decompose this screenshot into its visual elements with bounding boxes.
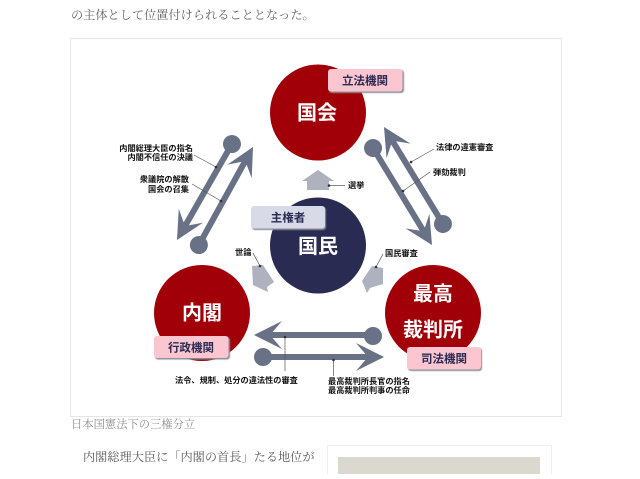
label: dissolution and convocation: 国会の召集 xyxy=(148,184,189,194)
caption: 日本国憲法下の三権分立 xyxy=(71,419,195,431)
circle: Diet: 国会 xyxy=(297,102,337,124)
circle: Diet xyxy=(270,64,366,160)
panel: side image card xyxy=(327,445,552,474)
label: popular review: 国民審査 xyxy=(385,248,418,258)
label: nomination and no-confidence: 内閣総理大臣の指名 xyxy=(119,143,193,153)
label: impeachment court xyxy=(402,167,466,192)
label: judicial review of laws: 法律の違憲審査 xyxy=(436,142,493,152)
arrow: impeachment down-right xyxy=(356,133,444,252)
label: public opinion: 世論 xyxy=(235,247,252,257)
label: election xyxy=(328,180,365,190)
image placeholder xyxy=(338,457,540,474)
badge: legislature xyxy=(328,69,404,93)
arrow: judicial review up-left xyxy=(372,120,460,239)
label: impeachment court: 弾劾裁判 xyxy=(433,167,466,177)
arrow: constitutionality review leftwards xyxy=(254,321,382,349)
label: constitutionality review xyxy=(175,336,298,385)
icon: popular review arrow xyxy=(362,266,383,293)
circle: the people xyxy=(270,198,366,294)
circle: cabinet: 内閣 xyxy=(182,302,222,324)
icon: election arrow xyxy=(302,170,334,190)
label: public opinion xyxy=(235,247,261,267)
circle: the people: 国民 xyxy=(298,236,338,258)
label: chief justice appointment xyxy=(328,359,411,395)
circle: cabinet xyxy=(154,265,250,361)
label: constitutionality review: 法令、規制、処分の違法性の審査 xyxy=(175,375,298,385)
intro text: の主体として位置付けられることとなった。 xyxy=(71,8,315,22)
badge: sovereign: 主権者 xyxy=(271,210,305,224)
icon: public opinion arrow xyxy=(252,265,274,292)
badge: executive xyxy=(154,336,230,360)
circle: supreme court: 裁判所 xyxy=(403,318,463,342)
badge: executive: 行政機関 xyxy=(168,340,214,354)
badge: sovereign xyxy=(251,206,326,230)
label: nomination and no-confidence xyxy=(119,143,217,168)
circle: supreme court: 最高 xyxy=(413,282,453,306)
circle: supreme court xyxy=(385,265,481,361)
label: dissolution and convocation xyxy=(140,174,222,202)
label: election: 選挙 xyxy=(348,180,365,190)
body text: 内閣総理大臣に「内閣の首長」たる地位が xyxy=(83,450,315,464)
label: chief justice appointment: 最高裁判所判事の任命 xyxy=(328,385,411,395)
badge: legislature: 立法機関 xyxy=(342,74,388,88)
panel: diagram frame xyxy=(70,38,562,417)
badge: judiciary: 司法機関 xyxy=(421,352,467,366)
label: judicial review of laws xyxy=(410,142,493,163)
label: chief justice appointment: 最高裁判所長官の指名 xyxy=(328,376,410,386)
arrow: cabinet nomination down-left xyxy=(165,129,249,247)
label: popular review xyxy=(375,248,418,268)
label: dissolution and convocation: 衆議院の解散 xyxy=(140,174,190,184)
label: nomination and no-confidence: 内閣不信任の決議 xyxy=(127,152,193,162)
badge: judiciary xyxy=(407,347,482,371)
arrow: dissolution up-right xyxy=(182,140,265,260)
arrow: chief justice nomination rightwards xyxy=(254,343,384,371)
